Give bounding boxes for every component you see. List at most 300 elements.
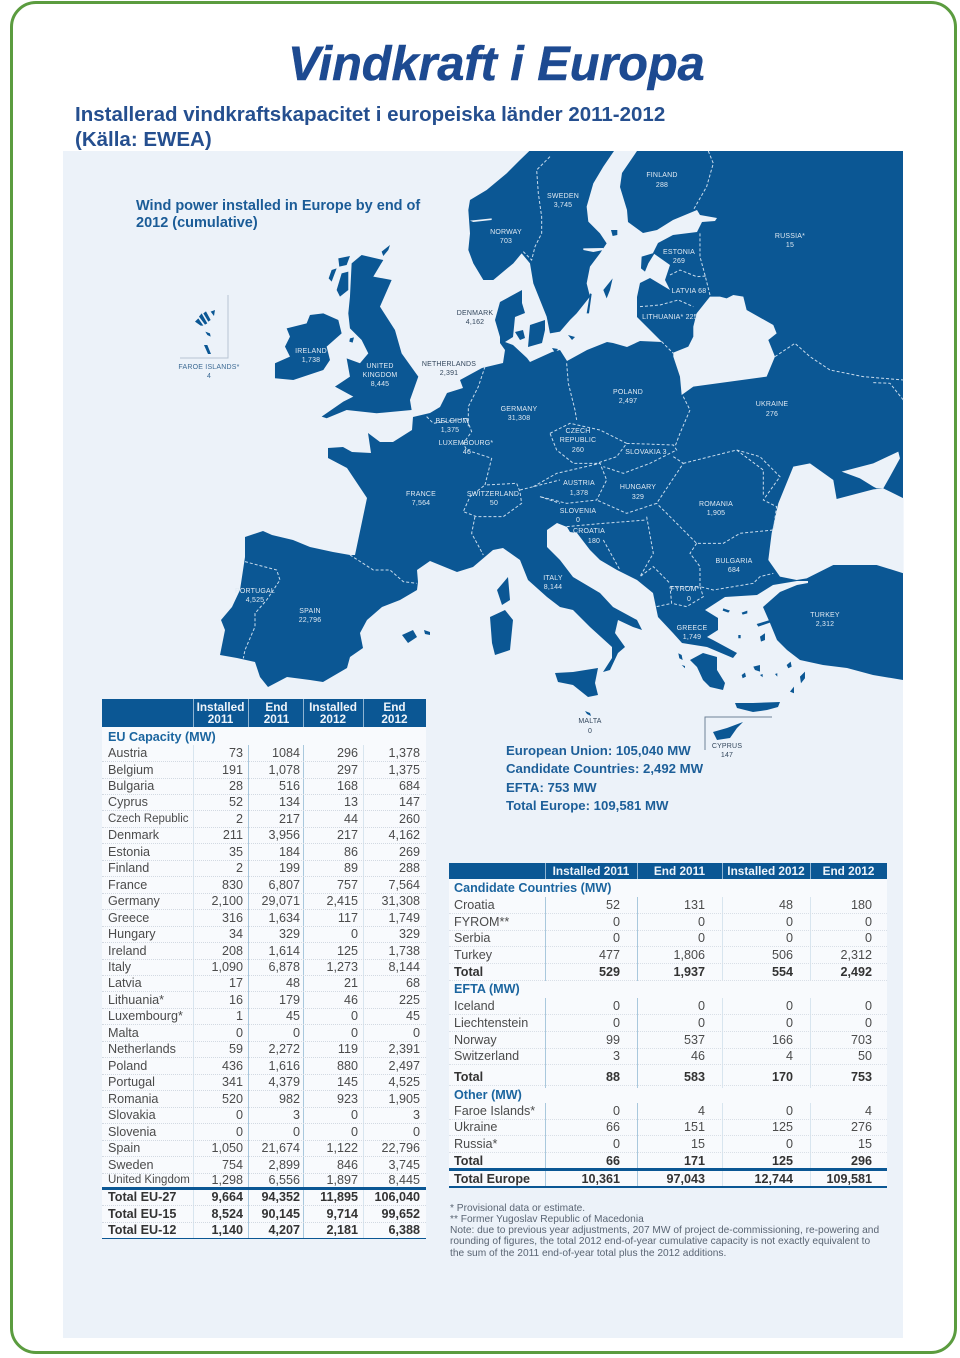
rows: EU totals: 1,140 [211,1223,243,1237]
rows: EU countries: 45 [286,1009,300,1023]
rows: EFTA countries: 0 [786,1016,793,1030]
label: United Kingdom: KINGDOM [363,372,397,379]
section heading: Candidate Countries: Candidate Countries (MW) [454,881,611,895]
rows: EFTA countries: 3 [613,1049,620,1063]
rows: EFTA countries: 88 [606,1070,620,1084]
rows: EU countries: Germany [108,894,160,908]
rows: EU countries: 59 [229,1042,243,1056]
rows: EU countries: 134 [279,795,300,809]
rows: EU countries: Lithuania* [108,993,164,1007]
row: Total Europe: 97,043 [666,1172,705,1186]
label: Finland: FINLAND [646,172,678,179]
rows: EFTA countries: 0 [865,999,872,1013]
rows: EU countries: 341 [222,1075,243,1089]
rows: candidate countries: Serbia [454,931,490,945]
label: Malta: MALTA [578,718,602,725]
row: Total Europe: Total Europe [454,1172,530,1186]
label: Bulgaria: BULGARIA [716,558,752,565]
table header: End [265,700,288,714]
rows: EU countries: 329 [399,927,420,941]
rows: EFTA countries: 537 [684,1033,705,1047]
rows: EU countries: 45 [406,1009,420,1023]
rows: EU countries: 21,674 [261,1141,300,1155]
rows: EFTA countries: Norway [454,1033,497,1047]
rows: EFTA countries: Total [454,1070,483,1084]
rows: EU countries: Denmark [108,828,159,842]
rows: EU totals: 94,352 [261,1190,300,1204]
rows: EU countries: Slovenia [108,1125,156,1139]
rows: EU countries: 179 [279,993,300,1007]
rows: EU totals: 9,714 [326,1207,358,1221]
rows: candidate countries [449,898,887,981]
label: Cyprus: 147 [721,752,733,759]
rows: candidate countries: 529 [599,965,620,979]
rows: EU countries: 1 [236,1009,243,1023]
rows: other countries: 15 [858,1137,872,1151]
label: FYROM: 0 [687,596,691,603]
label: Estonia: 269 [673,258,685,265]
table header: End 2012 [823,864,874,878]
row: Total Europe: 12,744 [754,1172,793,1186]
rows: EU countries: 1,298 [211,1173,243,1187]
rows: candidate countries: 506 [772,948,793,962]
rows: EFTA countries: 753 [851,1070,872,1084]
rows: EU countries: 48 [286,976,300,990]
rows: EU countries: 0 [236,1108,243,1122]
rows: EU countries: 86 [344,845,358,859]
label: France: 7,564 [412,500,430,507]
rows: EU countries: 4,525 [388,1075,420,1089]
rows: EU countries: 1,738 [388,944,420,958]
label: Austria: AUSTRIA [563,480,595,487]
rows: other countries: Total [454,1154,483,1168]
rows: EFTA countries: 170 [772,1070,793,1084]
rows: EU countries: 2,497 [388,1059,420,1073]
table background [102,727,426,1238]
rows: EU totals: 11,895 [320,1190,358,1204]
map heading: 2012 (cumulative) [136,215,258,231]
rows: EU countries: 516 [279,779,300,793]
label: Croatia: 180 [588,538,600,545]
label: Ireland: 1,738 [302,357,320,364]
rows: EFTA countries: 50 [858,1049,872,1063]
rows: EFTA countries: 0 [613,999,620,1013]
label: Poland: POLAND [613,389,643,396]
label: Slovakia: SLOVAKIA 3 [625,449,667,456]
rows: candidate countries: 131 [684,898,705,912]
rows: EU countries: 68 [406,976,420,990]
rows: EU countries: 208 [222,944,243,958]
column dividers [545,897,811,1186]
rows: EFTA countries: 4 [786,1049,793,1063]
rows: EU countries: 21 [344,976,358,990]
rows: EU countries: 1,375 [388,762,420,776]
label: Denmark: 4,162 [466,319,484,326]
rows: EU countries: 269 [399,845,420,859]
map: country borders [243,151,903,658]
label: Faroe Islands: FAROE ISLANDS* [178,364,240,371]
total: Candidate Countries: Candidate Countries: 2,492 MW [506,761,703,776]
rows: other countries: 151 [684,1120,705,1134]
footnote: note on totals: Note: due to previous year adjustments, 207 MW of project de-commissioning, re-powering and [450,1225,879,1236]
rows: candidate countries: 0 [613,931,620,945]
rows: candidate countries: 48 [779,898,793,912]
rows: EFTA countries: 0 [865,1016,872,1030]
rows: EU countries: 520 [222,1092,243,1106]
rows: EU countries: 2,100 [211,894,243,908]
rows: EU countries: Czech Republic [108,813,189,825]
rows: EU countries: Poland [108,1059,147,1073]
label: Portugal: 4,525 [246,597,264,604]
rows: EU countries: 22,796 [381,1141,420,1155]
label: Slovenia: SLOVENIA [560,508,596,515]
rows: EU countries: 684 [399,779,420,793]
rows: EU countries: 754 [222,1158,243,1172]
label: Cyprus: CYPRUS [712,743,742,750]
label: Czech Republic: 260 [572,447,584,454]
label: Portugal: PORTUGAL [235,588,275,595]
table header [449,863,887,879]
rows: EU countries: 147 [399,795,420,809]
rows: EU countries: 44 [344,812,358,826]
rows: other countries: 0 [613,1137,620,1151]
label: Belgium: 1,375 [441,427,459,434]
rows: other countries: 4 [865,1104,872,1118]
map: Cyprus inset [705,717,772,750]
label: Turkey: 2,312 [816,621,834,628]
rows: EU countries: 8,144 [388,960,420,974]
rows: EU countries: 0 [236,1125,243,1139]
rows: candidate countries: 0 [698,931,705,945]
table header: Installed 2012 [727,864,805,878]
label: France: FRANCE [406,491,436,498]
rows: EU countries: Romania [108,1092,158,1106]
rows: candidate countries: 0 [698,915,705,929]
rows: EU countries: 13 [344,795,358,809]
rows: EU countries: 1,749 [388,911,420,925]
rows: EU countries: 0 [351,1108,358,1122]
subtitle [75,103,665,151]
label: Estonia: ESTONIA [663,249,695,256]
rows: EU countries: Italy [108,960,131,974]
rows: EU countries: 2 [236,861,243,875]
table header: 2012 [381,712,408,726]
rows: other countries: 0 [613,1104,620,1118]
rows: EU countries: 846 [337,1158,358,1172]
total: European Union: European Union: 105,040 MW [506,743,691,758]
rows: EFTA countries: 0 [613,1016,620,1030]
rows: EU totals [102,1187,426,1239]
rows: EU countries: 923 [337,1092,358,1106]
rows: EU countries: 28 [229,779,243,793]
rows: EU countries: Portugal [108,1075,155,1089]
label: Czech Republic: CZECH [565,428,591,435]
rows: candidate countries: 554 [772,965,793,979]
row: Total Europe: 109,581 [826,1172,872,1186]
map heading: Wind power installed in Europe by end of [136,198,420,214]
rows: candidate countries: 1,937 [673,965,705,979]
label: Norway: 703 [500,238,512,245]
rows: candidate countries: 180 [851,898,872,912]
table header: Installed [309,700,357,714]
rows: other countries: 125 [772,1154,793,1168]
label: FYROM: FYROM* [670,586,700,593]
table header: 2011 [264,712,289,726]
label: Austria: 1,378 [570,490,588,497]
rows: EU countries: 2,899 [268,1158,300,1172]
rows: EU countries: 125 [337,944,358,958]
rows: EU countries: 2,391 [388,1042,420,1056]
label: Luxembourg: 46 [463,449,471,456]
rows: other countries: 0 [786,1137,793,1151]
rows: EU countries: 1,050 [211,1141,243,1155]
label: Germany: 31,308 [508,415,530,422]
label: United Kingdom: UNITED [366,363,394,370]
footnote: note on totals: the sum of the 2011 end-of-year total plus the 2012 additions. [450,1248,726,1259]
rows: candidate countries: Croatia [454,898,495,912]
rows: other countries: 66 [606,1154,620,1168]
map: Black Sea cut-out [768,452,904,580]
rows: EU countries: 0 [236,1026,243,1040]
rows: EU countries: 3,745 [388,1158,420,1172]
map: Faroe Islands inset frame [180,295,228,358]
rows: EU countries: 0 [351,1125,358,1139]
rows: EU countries: 52 [229,795,243,809]
rows: EU countries: 8,445 [388,1173,420,1187]
section heading: Other: Other (MW) [454,1088,522,1102]
rows: EU countries: 1,616 [268,1059,300,1073]
rows: EU countries: 16 [229,993,243,1007]
rows: EU countries: 29,071 [261,894,300,908]
label: Ukraine: UKRAINE [756,401,788,408]
label: Netherlands: NETHERLANDS [422,361,476,368]
map: Danish islands, Bornholm and Rügen [515,320,575,353]
total: Total Europe: Total Europe: 109,581 MW [506,798,668,813]
rows: other countries: 15 [691,1137,705,1151]
rows: candidate countries: 0 [865,915,872,929]
rows: EU countries: 217 [279,812,300,826]
rows: EU countries: 1,378 [388,746,420,760]
label: Lithuania: LITHUANIA* 225 [642,314,698,321]
label: Norway: NORWAY [490,229,522,236]
rows: EU countries: 217 [337,828,358,842]
rows: EU totals: Total EU-12 [108,1223,176,1237]
rows: EU countries: Spain [108,1141,140,1155]
rows: EFTA countries: 0 [698,999,705,1013]
rows: EU countries: 145 [337,1075,358,1089]
row: Total Europe: 10,361 [581,1172,620,1186]
rows: EU countries: 260 [399,812,420,826]
label: Netherlands: 2,391 [440,370,458,377]
label: Romania: ROMANIA [699,501,733,508]
rows: EU countries: 1,614 [268,944,300,958]
rows: EU countries: Hungary [108,927,156,941]
rows: EU countries: 0 [293,1125,300,1139]
rows: EU countries: Bulgaria [108,779,154,793]
label: Sweden: SWEDEN [547,193,579,200]
rows: EU countries: 0 [351,1009,358,1023]
map: Aegean and Ionian islands [678,608,805,693]
rows: other countries: 171 [684,1154,705,1168]
rows: EU countries: 168 [337,779,358,793]
label: Greece: GREECE [677,625,707,632]
rows: EFTA countries: 0 [786,999,793,1013]
rows: EU countries: 0 [413,1026,420,1040]
rows: EU countries: 6,556 [268,1173,300,1187]
rows: other countries [449,1104,887,1168]
label: Slovenia: 0 [576,517,580,524]
label: Turkey: TURKEY [810,612,840,619]
label: Faroe Islands: 4 [207,373,211,380]
rows: EU countries: 1084 [272,746,300,760]
rows: EU countries: 757 [337,878,358,892]
rows: EU countries: 1,905 [388,1092,420,1106]
rows: EU countries: Malta [108,1026,139,1040]
rows: EU countries: 46 [344,993,358,1007]
label: Luxembourg: LUXEMBOURG* [439,440,493,447]
rows: EU totals: Total EU-15 [108,1207,176,1221]
rows: candidate countries: 1,806 [673,948,705,962]
map labels [178,172,840,759]
total: EFTA: EFTA: 753 MW [506,780,597,795]
rows: EU countries: 288 [399,861,420,875]
table header [102,699,426,727]
rows: EU countries: 1,090 [211,960,243,974]
section heading: EU Capacity: EU Capacity (MW) [108,730,216,744]
rows: other countries: Ukraine [454,1120,497,1134]
rows: EU countries: 2,272 [268,1042,300,1056]
footnote: provisional data: * Provisional data or estimate. [450,1203,585,1214]
label: Romania: 1,905 [707,510,725,517]
rows: EU countries [102,746,426,1187]
table header: Installed [197,700,244,714]
rows: EU countries: 89 [344,861,358,875]
rows: EU countries: 1,634 [268,911,300,925]
label: Denmark: DENMARK [457,310,493,317]
map: Mediterranean islands [402,577,780,716]
rows: EU countries: 17 [229,976,243,990]
rows: EU countries: 4,379 [268,1075,300,1089]
rows: EU countries: Cyprus [108,795,148,809]
rows: EU countries: France [108,878,147,892]
rows: EU countries: 117 [338,911,358,925]
rows: EU countries: 211 [223,828,243,842]
rows: EFTA countries: 99 [606,1033,620,1047]
label: Croatia: CROATIA [573,528,605,535]
rows: EU countries: 0 [293,1026,300,1040]
rows: other countries: 125 [772,1120,793,1134]
rows: EU countries: 184 [279,845,300,859]
label: Czech Republic: REPUBLIC [560,437,596,444]
rows: EU countries: 35 [229,845,243,859]
map: Ireland, Great Britain and Faroe Islands [195,245,418,418]
rows: candidate countries: 0 [786,915,793,929]
rows: other countries: 66 [606,1120,620,1134]
subtitle: Installerad vindkraftskapacitet i europeiska länder 2011-2012 [75,103,665,126]
map heading [136,198,420,231]
rows: EU countries: Sweden [108,1158,154,1172]
footnotes [450,1203,879,1259]
rows: candidate countries: FYROM** [454,915,509,929]
rows: other countries: 4 [698,1104,705,1118]
label: Belgium: BELGIUM [436,418,468,425]
rows: EU countries: 982 [279,1092,300,1106]
rows: EFTA countries: Switzerland [454,1049,519,1063]
rows: EU countries: Estonia [108,845,150,859]
label: Ireland: IRELAND [295,348,327,355]
rows: EU countries: Netherlands [108,1042,176,1056]
label: Switzerland: SWITZERLAND [467,491,519,498]
rows: EU countries: 296 [337,746,358,760]
rows: EU countries: 73 [229,746,243,760]
rows: EU countries: 0 [351,927,358,941]
rows: EFTA countries: Iceland [454,999,495,1013]
label: Finland: 288 [656,182,668,189]
rows: EU totals: 8,524 [211,1207,243,1221]
rows: EU totals: 9,664 [211,1190,243,1204]
rows: EU countries: 329 [279,927,300,941]
footnote: FYROM: ** Former Yugoslav Republic of Macedonia [450,1214,644,1225]
rows: EU countries: 436 [222,1059,243,1073]
rows: EU totals: Total EU-27 [108,1190,176,1204]
rows: candidate countries: 2,312 [840,948,872,962]
rows: EU countries: 225 [399,993,420,1007]
rows: EU countries: 191 [222,762,243,776]
table header: 2012 [320,712,346,726]
rows: other countries: Faroe Islands* [454,1104,535,1118]
rows: EU totals: 6,388 [388,1223,420,1237]
rows: EU countries: 2 [236,812,243,826]
rows: other countries: 276 [851,1120,872,1134]
column dividers [193,745,364,1238]
rows: EU countries: Luxembourg* [108,1009,183,1023]
rows: EU countries: 34 [229,927,243,941]
rows: candidate countries: 0 [786,931,793,945]
rows: EU countries: Finland [108,861,149,875]
map: continental Europe landmass [220,151,903,687]
rows: EU countries: Greece [108,911,149,925]
rows: EU totals: 4,207 [268,1223,300,1237]
label: Poland: 2,497 [619,398,637,405]
rows: EFTA countries: 703 [851,1033,872,1047]
rows: EU countries: 199 [279,861,300,875]
label: Latvia: LATVIA 68 [672,288,706,295]
rows: candidate countries: Total [454,965,483,979]
label: Hungary: 329 [632,494,644,501]
rows: EU countries: Austria [108,746,147,760]
map: Norway and Sweden [468,151,655,333]
rows: EFTA countries: 583 [684,1070,705,1084]
title: Vindkraft i Europa [288,37,705,91]
label: Spain: SPAIN [299,608,321,615]
rows: EU countries: 1,122 [326,1141,358,1155]
rows: EU countries: United Kingdom [108,1174,190,1186]
rows: candidate countries: 0 [865,931,872,945]
label: Malta: 0 [588,728,592,735]
rows: EU countries: 31,308 [381,894,420,908]
panel: map and table background [63,151,903,1338]
table header: 2011 [208,712,233,726]
table header: End 2011 [654,864,705,878]
footnote: note on totals: rounding of figures, the total 2012 end-of-year cumulative capacity is not exactly equivalent to [450,1236,870,1247]
rows: EU countries: 6,878 [268,960,300,974]
rows: candidate countries: 0 [613,915,620,929]
label: Sweden: 3,745 [554,202,572,209]
table header: Installed 2011 [553,864,629,878]
rows: EU countries: 1,273 [326,960,358,974]
label: Italy: ITALY [543,575,563,582]
label: Italy: 8,144 [544,584,562,591]
